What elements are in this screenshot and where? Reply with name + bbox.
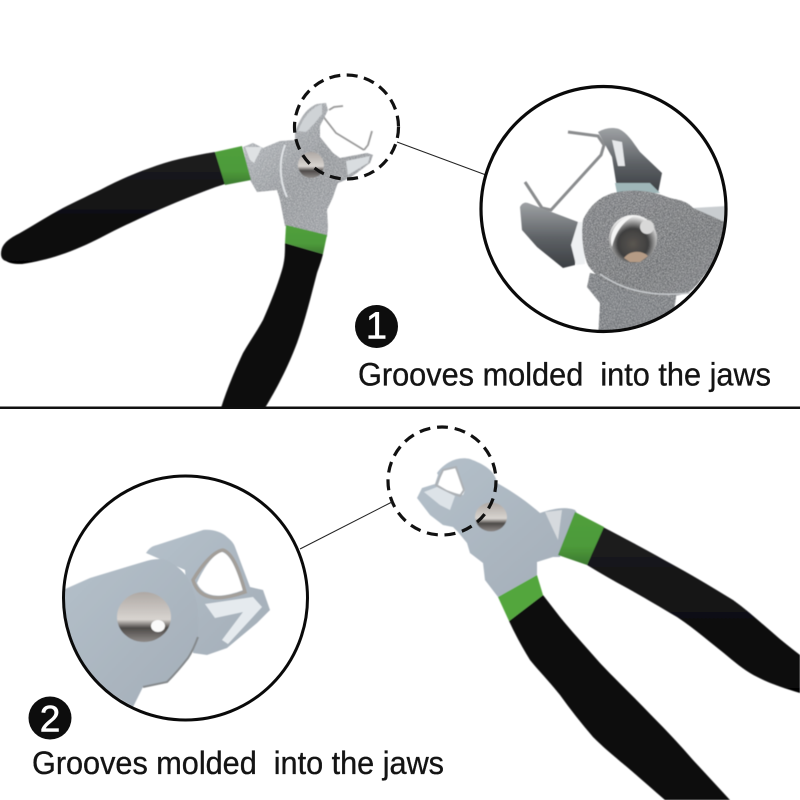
- left green collar: [215, 146, 251, 185]
- zoom contents: [520, 128, 730, 340]
- zoom contents: [55, 530, 270, 707]
- metal head: [417, 458, 577, 597]
- right corner highlight: [693, 206, 727, 222]
- lower green collar: [498, 575, 543, 621]
- number badge 2: 2: [40, 698, 60, 740]
- upper jaw highlight: [298, 104, 322, 132]
- main plate: [582, 191, 730, 297]
- panel: bottom section: [28, 427, 800, 800]
- triangular opening: [197, 552, 243, 596]
- zoomed view of closed jaws: [55, 476, 308, 720]
- rivet: [117, 592, 171, 642]
- jaw highlight: [424, 487, 455, 510]
- lower handle: [221, 243, 323, 408]
- pliers, closed jaws: [417, 458, 800, 800]
- back jaw: [146, 530, 270, 655]
- left jaw white strip: [571, 222, 585, 265]
- rivet right highlight: [640, 220, 654, 234]
- hole rim: [436, 467, 464, 496]
- staple: [525, 132, 604, 210]
- caption 1: Grooves molded into the jaws: [358, 356, 771, 392]
- staple wire: [322, 106, 372, 150]
- upper handle: [587, 527, 800, 693]
- plate edge shading: [143, 637, 198, 687]
- panel: top section: [1, 75, 771, 408]
- pliers, open jaws holding a staple: [1, 103, 373, 408]
- rivet: [609, 215, 657, 263]
- plate shoulder highlight: [545, 510, 562, 540]
- rivet glint: [151, 620, 165, 632]
- left shoulder highlight: [245, 147, 262, 163]
- upper green collar: [558, 512, 604, 565]
- number badge 2: [28, 696, 72, 740]
- chrome rim of opening: [193, 550, 245, 598]
- rivet reflection: [624, 252, 648, 262]
- dashed magnifier ring: [294, 75, 398, 179]
- lower plate rim highlight: [600, 274, 690, 294]
- left handle: [1, 152, 225, 264]
- lower green collar: [285, 225, 327, 254]
- number badge 1: [355, 305, 398, 348]
- metal head: [243, 103, 373, 237]
- lower handle: [509, 595, 730, 800]
- rivet: [475, 502, 507, 532]
- caption 2: Grooves molded into the jaws: [32, 745, 444, 781]
- leader line to zoomed view: [397, 142, 486, 175]
- divider line between the two sections: [0, 406, 800, 409]
- zoom ring: [481, 86, 726, 332]
- upper jaw teal band: [615, 183, 660, 193]
- lower neck: [586, 272, 677, 330]
- rivet top highlight: [611, 216, 634, 247]
- left jaw: [520, 203, 578, 268]
- upper jaw highlight: [612, 140, 625, 166]
- zoom ring: [64, 476, 308, 720]
- main plate: [65, 558, 193, 706]
- upper jaw: [598, 128, 662, 193]
- leader line to zoomed view: [300, 502, 392, 549]
- jaw highlight: [346, 156, 370, 175]
- number badge 1: 1: [366, 306, 387, 348]
- dashed magnifier ring: [388, 427, 496, 535]
- plate edge highlight: [281, 145, 287, 197]
- zoomed view of open jaws: [481, 86, 730, 340]
- rivet: [298, 152, 324, 178]
- jaw highlight: [205, 597, 262, 644]
